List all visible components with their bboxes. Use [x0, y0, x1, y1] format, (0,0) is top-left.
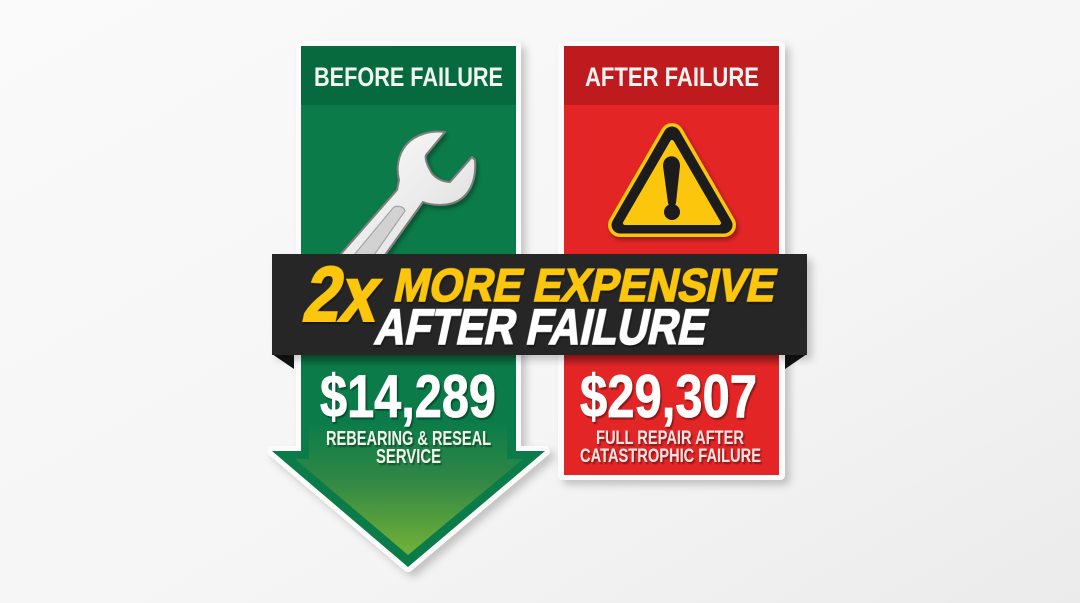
white arrow outline [272, 46, 545, 567]
before failure service label: SERVICE [376, 446, 441, 468]
banner bar [272, 254, 807, 355]
after failure service label: CATASTROPHIC FAILURE [580, 446, 761, 467]
icon: warning triangle [620, 135, 724, 225]
after failure service label: FULL REPAIR AFTER [596, 428, 744, 449]
red panel shadow [564, 355, 779, 367]
before failure service label: REBEARING & RESEAL [326, 428, 491, 450]
after failure label: AFTER FAILURE [371, 299, 714, 355]
red card fill [564, 46, 779, 475]
green arrow body [272, 46, 545, 567]
red card [558, 41, 785, 480]
after failure heading: AFTER FAILURE [585, 62, 759, 92]
after failure price [580, 363, 761, 467]
panel: before failure [272, 46, 545, 567]
before failure price [320, 363, 496, 468]
2x label: 2x [297, 251, 389, 338]
icon: wrench [340, 132, 475, 255]
left ribbon tail [272, 354, 294, 369]
price: 29,307: $29,307 [580, 363, 757, 430]
banner shadow on panels [301, 355, 516, 367]
price: 14,289: $14,289 [320, 363, 496, 430]
panel: after failure [558, 41, 785, 480]
before failure header band [301, 46, 516, 105]
more expensive label: MORE EXPENSIVE [390, 259, 782, 311]
exclamation mark [663, 156, 680, 206]
before failure heading: BEFORE FAILURE [314, 62, 503, 92]
right ribbon tail [785, 354, 807, 369]
callout banner [272, 251, 807, 369]
arrow inner gradient [295, 423, 523, 555]
after failure header band [564, 46, 779, 105]
